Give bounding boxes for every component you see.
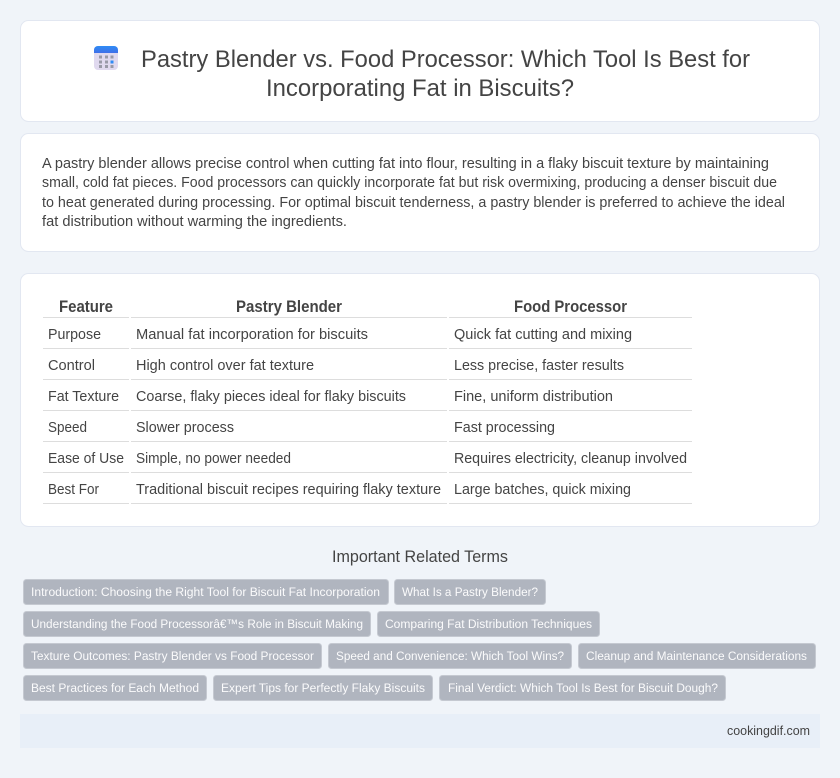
row: best for: Traditional biscuit recipes requiring flaky texture bbox=[136, 482, 441, 498]
row: speed: Fast processing bbox=[454, 420, 555, 436]
row: speed: Speed bbox=[48, 420, 87, 436]
row: purpose: Quick fat cutting and mixing bbox=[454, 327, 632, 343]
table header: Pastry Blender bbox=[236, 298, 343, 316]
footer bbox=[20, 714, 820, 748]
row: control: Control bbox=[48, 358, 95, 374]
tag bbox=[394, 580, 546, 604]
row: control bbox=[48, 358, 624, 374]
row: ease of use: Simple, no power needed bbox=[136, 451, 291, 467]
panel: summary paragraph bbox=[20, 134, 820, 252]
panel: comparison table bbox=[20, 274, 820, 526]
panel: title card bbox=[20, 20, 820, 122]
tag bbox=[24, 676, 206, 700]
row: best for: Large batches, quick mixing bbox=[454, 482, 631, 498]
row: control: High control over fat texture bbox=[136, 358, 314, 374]
tag: Cleanup and Maintenance Considerations bbox=[586, 649, 807, 663]
row: speed bbox=[48, 420, 555, 436]
icon: calendar bbox=[94, 46, 118, 70]
tag bbox=[378, 612, 600, 636]
tag: Expert Tips for Perfectly Flaky Biscuits bbox=[221, 681, 425, 695]
panel: summary paragraph: fat distribution without warming the ingredients. bbox=[42, 214, 347, 230]
row: purpose bbox=[48, 327, 632, 343]
title: Pastry Blender vs. Food Processor: Which Tool Is Best for bbox=[141, 46, 750, 73]
tag: Best Practices for Each Method bbox=[31, 681, 199, 695]
row: purpose: Purpose bbox=[48, 327, 101, 343]
tag: What Is a Pastry Blender? bbox=[402, 585, 538, 599]
tag bbox=[24, 644, 322, 668]
row: ease of use bbox=[48, 451, 687, 467]
row: best for bbox=[48, 482, 631, 498]
related term tags bbox=[24, 580, 816, 700]
panel: summary paragraph: A pastry blender allows precise control when cutting fat into flour, resulting in a flaky biscuit texture by maintaining bbox=[42, 156, 769, 172]
tag: Final Verdict: Which Tool Is Best for Biscuit Dough? bbox=[448, 681, 718, 695]
tag bbox=[328, 644, 572, 668]
title: Incorporating Fat in Biscuits? bbox=[266, 75, 574, 102]
heading: related terms: Important Related Terms bbox=[332, 548, 508, 566]
panel: summary paragraph: small, cold fat pieces. Food processors can quickly incorporate fat but risk overmixing, producing a denser biscuit due bbox=[42, 175, 777, 191]
table header: Food Processor bbox=[514, 298, 628, 316]
panel: summary paragraph: to heat generated during processing. For optimal biscuit tenderness, a pastry blender is preferred to achieve the ideal bbox=[42, 195, 785, 211]
tag bbox=[24, 580, 388, 604]
tag: Comparing Fat Distribution Techniques bbox=[385, 617, 592, 631]
row: ease of use: Requires electricity, cleanup involved bbox=[454, 451, 687, 467]
table header: Feature bbox=[59, 298, 113, 316]
table header bbox=[59, 298, 628, 316]
row: speed: Slower process bbox=[136, 420, 234, 436]
tag bbox=[24, 612, 370, 636]
tag: Introduction: Choosing the Right Tool for Biscuit Fat Incorporation bbox=[31, 585, 380, 599]
tag: Understanding the Food Processorâ€™s Role in Biscuit Making bbox=[31, 617, 363, 631]
tag: Speed and Convenience: Which Tool Wins? bbox=[336, 649, 564, 663]
tag bbox=[440, 676, 726, 700]
row: ease of use: Ease of Use bbox=[48, 451, 124, 467]
footer: cookingdif.com bbox=[727, 724, 810, 738]
row: purpose: Manual fat incorporation for biscuits bbox=[136, 327, 368, 343]
row: control: Less precise, faster results bbox=[454, 358, 624, 374]
tag bbox=[578, 644, 816, 668]
row: fat texture: Coarse, flaky pieces ideal for flaky biscuits bbox=[136, 389, 406, 405]
tag bbox=[214, 676, 432, 700]
row: best for: Best For bbox=[48, 482, 99, 498]
row: fat texture: Fat Texture bbox=[48, 389, 119, 405]
tag: Texture Outcomes: Pastry Blender vs Food Processor bbox=[31, 649, 314, 663]
title bbox=[141, 46, 750, 102]
row: fat texture: Fine, uniform distribution bbox=[454, 389, 613, 405]
row: fat texture bbox=[48, 389, 613, 405]
